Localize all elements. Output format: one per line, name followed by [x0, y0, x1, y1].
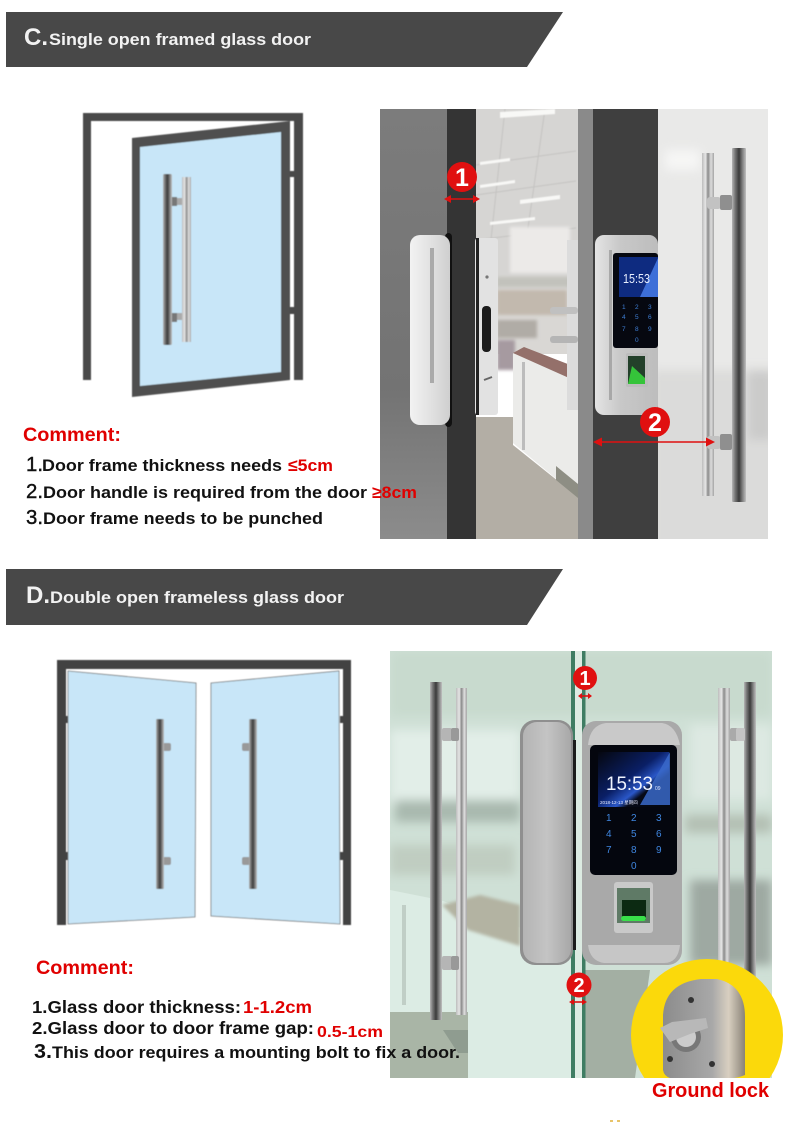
keypad digits: 9	[648, 326, 652, 333]
left glass leaf	[68, 671, 196, 924]
comment heading C: Comment:	[23, 425, 121, 446]
keypad digits: 1	[606, 813, 612, 824]
comment line 2: 2.Glass door to door frame gap:	[32, 1018, 314, 1038]
office background view	[476, 109, 578, 539]
comment line 3: This door requires a mounting bolt to fix a door.	[52, 1043, 460, 1062]
marker 2: 2	[648, 409, 662, 437]
keypad digits: 5	[631, 829, 637, 840]
dark door frame panel	[593, 109, 658, 539]
double door frame	[57, 660, 351, 925]
glass edges	[575, 651, 582, 1078]
office background	[390, 651, 772, 1078]
lock hardware behind door edge	[550, 240, 578, 410]
right lock device: 09	[655, 786, 661, 792]
frame hinges	[66, 716, 343, 860]
photo: single door lock on frame	[380, 109, 780, 550]
door handle	[163, 174, 191, 345]
comment line 1: ≤5cm	[288, 456, 333, 475]
ground lock callout	[631, 959, 783, 1111]
keypad digits: 1	[622, 304, 626, 311]
right pull handles	[718, 682, 756, 992]
right glass leaf	[211, 671, 340, 924]
right handle	[242, 719, 257, 889]
banner C title: Single open framed glass door	[49, 30, 311, 49]
keypad digits: 7	[622, 326, 626, 333]
comment line 2: ≥8cm	[372, 483, 417, 502]
comment line 1: 1-1.2cm	[243, 997, 312, 1017]
comment line 2: 2.	[26, 481, 43, 503]
ground lock icon	[660, 979, 745, 1078]
keypad digits: 5	[635, 314, 639, 321]
photo: double glass door lock	[390, 651, 772, 1078]
door leaf frame	[132, 121, 290, 397]
banner: section D	[6, 569, 563, 625]
comment line 1	[26, 454, 333, 476]
keypad digits: 9	[656, 845, 662, 856]
door frame	[83, 113, 303, 380]
keypad digits: 4	[606, 829, 612, 840]
comment line 1: 1.Glass door thickness:	[32, 997, 241, 1017]
left lock body	[520, 720, 574, 965]
comment heading D: Comment:	[36, 958, 134, 979]
comment line 1: 1.	[26, 454, 43, 476]
left handle	[156, 719, 171, 889]
glass area right	[658, 109, 768, 539]
left pull handles	[430, 682, 467, 1020]
dark door frame strip	[447, 109, 476, 539]
comment line 2: 0.5-1cm	[317, 1024, 383, 1041]
keypad digits: 0	[635, 337, 639, 344]
keypad digits: 7	[606, 845, 612, 856]
keypad digits: 4	[622, 314, 626, 321]
keypad digits: 2	[635, 304, 639, 311]
comment line 3: Door frame needs to be punched	[43, 509, 323, 528]
marker 1: 1	[455, 164, 469, 192]
banner D letter: D.	[26, 582, 50, 609]
marker 1: 1	[579, 668, 591, 690]
banner C letter: C.	[24, 24, 48, 51]
keypad digits: 6	[648, 314, 652, 321]
yellow circle	[631, 959, 783, 1078]
marker 1	[573, 666, 597, 699]
banner D title: Double open frameless glass door	[50, 588, 344, 607]
lock body left	[410, 233, 498, 427]
keypad digits: 8	[631, 845, 637, 856]
comment line 3: 3.	[34, 1041, 52, 1063]
diagram: double open frameless door	[57, 660, 351, 925]
marker 1	[444, 162, 480, 203]
keypad digits: 3	[656, 813, 662, 824]
small gold specks	[610, 1120, 620, 1122]
cabinet and floor	[390, 890, 571, 1078]
right lock device: 15:53	[606, 774, 653, 795]
banner: section C	[6, 12, 563, 67]
keypad digits: 3	[648, 304, 652, 311]
wall panel left	[380, 109, 447, 539]
ground lock label: Ground lock	[652, 1080, 770, 1102]
comment line 2: Door handle is required from the door	[43, 483, 367, 502]
comment line 2	[26, 481, 417, 503]
comment block D	[32, 958, 460, 1063]
frame hinges	[288, 171, 295, 314]
fingerprint sensor	[614, 882, 653, 933]
keypad digits: 8	[635, 326, 639, 333]
marker 2	[593, 407, 715, 446]
keypad digits: 0	[631, 861, 637, 872]
diagram: single open framed door	[83, 113, 303, 397]
door glass	[140, 132, 281, 386]
fingerprint sensor	[626, 353, 648, 387]
fingerprint lock device	[595, 235, 658, 415]
device screen	[590, 745, 677, 875]
fingerprint lock device: 15:53	[623, 271, 650, 286]
marker 2	[566, 972, 592, 1005]
gray frame edge	[578, 109, 593, 539]
right lock device	[582, 721, 682, 965]
door pull handle	[702, 148, 746, 502]
right lock device: 2018-12-13 星期四	[600, 800, 638, 806]
comment block C	[23, 425, 417, 529]
comment line 2	[32, 1018, 383, 1041]
keypad digits: 2	[631, 813, 637, 824]
comment line 1: Door frame thickness needs	[42, 456, 282, 475]
keypad digits: 6	[656, 829, 662, 840]
comment line 3: 3.	[26, 507, 43, 529]
device screen	[619, 257, 658, 297]
marker 2: 2	[573, 975, 585, 997]
